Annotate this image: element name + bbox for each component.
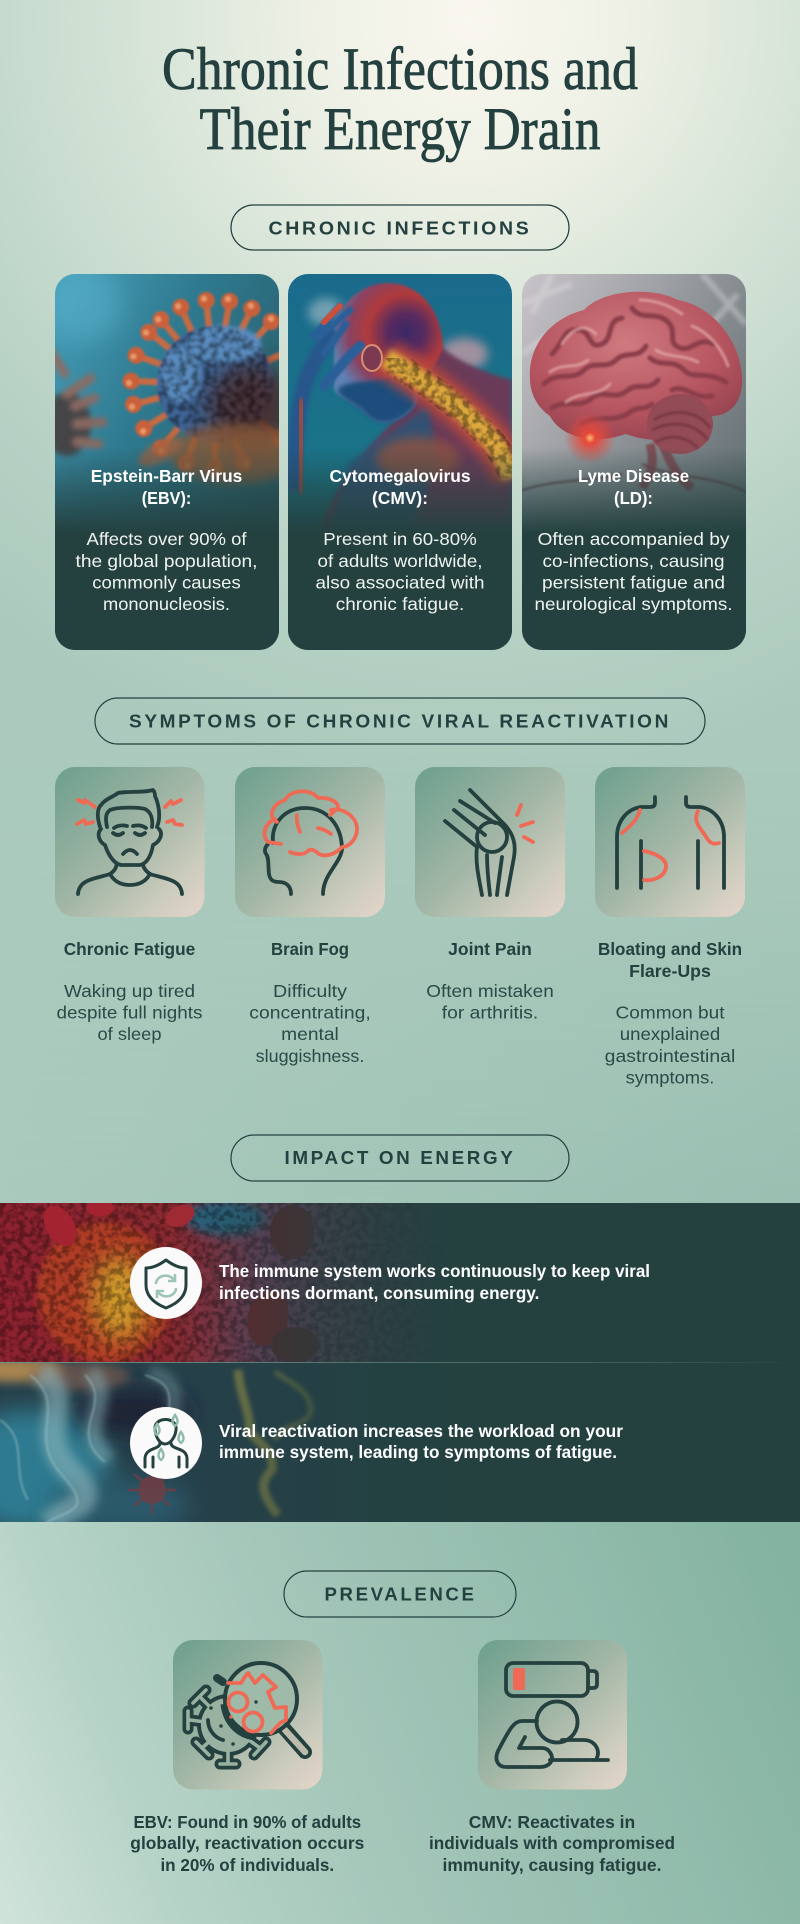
text: CMV prevalence: individuals with compromised	[429, 1833, 675, 1853]
icon: virus under magnifier	[173, 1640, 322, 1790]
heading pill: impact on energy: IMPACT ON ENERGY	[284, 1148, 516, 1168]
card text: CMV	[316, 466, 484, 614]
panel: Joint Pain	[415, 767, 565, 1022]
image: red tissue and blood cells	[0, 1203, 397, 1362]
text: immune workload: The immune system works continuously to keep viral	[219, 1261, 650, 1281]
card text: EBV: mononucleosis.	[103, 594, 230, 614]
icon: low battery and tired person	[478, 1640, 627, 1790]
text: Brain Fog: sluggishness.	[256, 1046, 364, 1066]
text: immune workload	[219, 1261, 650, 1303]
card text: EBV: Affects over 90% of	[86, 529, 247, 549]
text: Joint Pain: for arthritis.	[442, 1002, 538, 1022]
text: Bloating and Skin Flare-Ups: Common but	[616, 1002, 725, 1022]
card text: CMV: Present in 60-80%	[323, 529, 477, 549]
text: Brain Fog: Difficulty	[273, 981, 347, 1001]
panel: Chronic Fatigue	[55, 767, 204, 1044]
card text: CMV: (CMV):	[372, 488, 428, 508]
text: Chronic Fatigue	[56, 939, 203, 1044]
panel: CMV prevalence	[429, 1640, 675, 1875]
text: Joint Pain	[426, 939, 554, 1022]
text: Bloating and Skin Flare-Ups: Flare-Ups	[629, 961, 711, 981]
image: virus	[55, 274, 279, 650]
text: viral reactivation: Viral reactivation increases the workload on your	[219, 1421, 623, 1441]
text: EBV prevalence: globally, reactivation occurs	[130, 1833, 365, 1853]
text: EBV prevalence: in 20% of individuals.	[160, 1855, 334, 1875]
panel: Cytomegalovirus card	[288, 274, 512, 650]
text: Joint Pain: Often mistaken	[426, 981, 554, 1001]
text: viral reactivation: immune system, leading to symptoms of fatigue.	[219, 1442, 617, 1462]
panel: Epstein-Barr Virus card	[55, 274, 279, 650]
heading pill: chronic infections: CHRONIC INFECTIONS	[268, 218, 532, 238]
card text: EBV	[76, 466, 258, 614]
heading pill: symptoms: SYMPTOMS OF CHRONIC VIRAL REACTIVATION	[129, 712, 671, 732]
text: Brain Fog: Brain Fog	[271, 939, 349, 959]
card text: EBV: commonly causes	[92, 572, 241, 592]
heading pill: symptoms	[95, 698, 705, 744]
heading pill: prevalence: PREVALENCE	[324, 1584, 476, 1604]
text: CMV prevalence: CMV: Reactivates in	[469, 1812, 635, 1832]
icon: torso	[595, 767, 745, 917]
text: Chronic Fatigue: Chronic Fatigue	[64, 939, 196, 959]
icon: tired face	[55, 767, 204, 917]
text: Joint Pain: Joint Pain	[448, 939, 532, 959]
text: Chronic Fatigue: Waking up tired	[64, 981, 195, 1001]
text: Bloating and Skin Flare-Ups: symptoms.	[626, 1068, 714, 1088]
image: man holding head	[288, 274, 512, 650]
heading pill: prevalence	[284, 1571, 516, 1617]
card text: LD: neurological symptoms.	[534, 594, 733, 614]
card text: CMV: of adults worldwide,	[318, 551, 482, 571]
heading pill: impact on energy	[231, 1135, 569, 1181]
panel: impact band 2	[0, 1358, 800, 1531]
title: Their Energy Drain	[200, 96, 600, 162]
text: Bloating and Skin Flare-Ups	[598, 939, 742, 1088]
icon: shield with arrows	[130, 1247, 202, 1319]
text: CMV prevalence	[429, 1812, 675, 1875]
card text: LD: persistent fatigue and	[542, 572, 725, 592]
text: EBV prevalence	[130, 1812, 365, 1875]
card text: LD: (LD):	[614, 488, 653, 508]
icon: head with fog	[235, 767, 385, 917]
panel: impact band 1	[0, 1200, 800, 1363]
card text: EBV: Epstein-Barr Virus	[91, 466, 243, 486]
card text: CMV: chronic fatigue.	[336, 594, 464, 614]
text: Bloating and Skin Flare-Ups: Bloating and Skin	[598, 939, 742, 959]
panel: Lyme Disease card	[522, 274, 746, 650]
panel: Bloating and Skin Flare-Ups	[595, 767, 745, 1088]
card text: CMV: Cytomegalovirus	[330, 466, 471, 486]
text: immune workload: infections dormant, consuming energy.	[219, 1283, 539, 1303]
text: Chronic Fatigue: despite full nights	[56, 1002, 203, 1022]
title: Chronic Infections and	[162, 36, 638, 102]
card text: LD: co-infections, causing	[542, 551, 724, 571]
card text: EBV: the global population,	[76, 551, 258, 571]
text: Bloating and Skin Flare-Ups: gastrointestinal	[605, 1046, 735, 1066]
card text: LD	[534, 466, 732, 614]
text: Brain Fog: mental	[281, 1024, 339, 1044]
card text: EBV: (EBV):	[142, 488, 191, 508]
panel: Brain Fog	[235, 767, 385, 1066]
card text: CMV: also associated with	[316, 572, 484, 592]
text: EBV prevalence: EBV: Found in 90% of adults	[133, 1812, 361, 1832]
card text: LD: Often accompanied by	[538, 529, 730, 549]
icon: person with droplets	[130, 1407, 202, 1479]
text: Brain Fog: concentrating,	[249, 1002, 371, 1022]
image: smoke and virus	[0, 1363, 314, 1522]
text: CMV prevalence: immunity, causing fatigue.	[442, 1855, 662, 1875]
image: brain	[522, 274, 746, 650]
text: Brain Fog	[249, 939, 371, 1066]
card text: LD: Lyme Disease	[578, 466, 689, 486]
heading pill: chronic infections	[231, 205, 569, 250]
text: viral reactivation	[219, 1421, 623, 1462]
text: Chronic Fatigue: of sleep	[98, 1024, 162, 1044]
text: Bloating and Skin Flare-Ups: unexplained	[620, 1024, 720, 1044]
panel: EBV prevalence	[130, 1640, 365, 1875]
icon: knee joint	[415, 767, 565, 917]
title	[162, 36, 638, 162]
